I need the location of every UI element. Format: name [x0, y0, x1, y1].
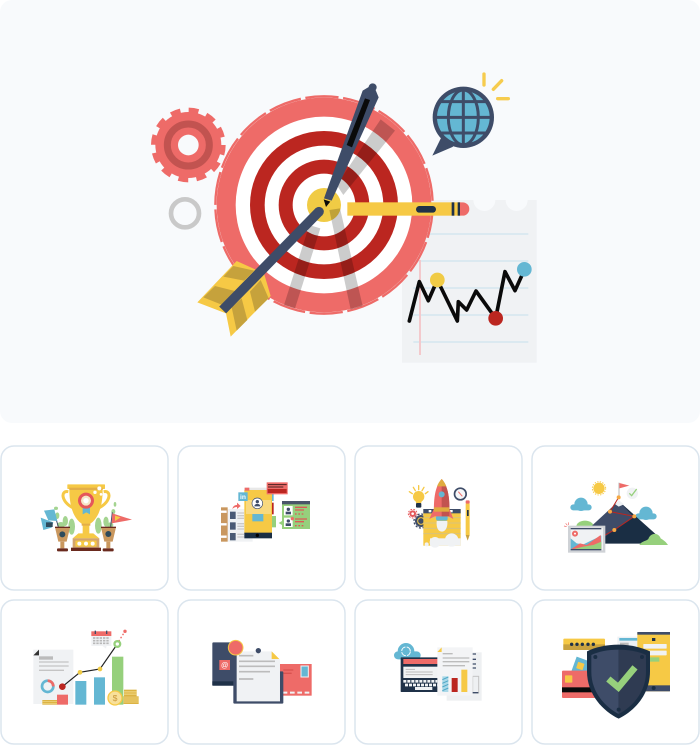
panel: trophy card	[1, 446, 168, 590]
icon: grey ring	[171, 199, 199, 227]
icon: photo card	[571, 657, 597, 678]
icon: chart screen	[564, 522, 605, 553]
icon: credit card	[562, 671, 595, 698]
icon: share arrow	[232, 503, 241, 509]
icon: linkedin badge: in	[240, 494, 246, 501]
icon: note pad	[423, 509, 461, 546]
icon: idea rays	[484, 74, 508, 99]
icon: notepad with line chart paper	[402, 189, 537, 363]
icon: check badge	[627, 488, 638, 499]
panel: mail card	[178, 600, 345, 744]
icon: document stack	[437, 647, 482, 701]
icon: salmon gear	[153, 110, 223, 180]
icon: phone login	[637, 632, 670, 691]
icon: tablet: @	[221, 661, 228, 670]
panel: laptop documents card	[355, 600, 522, 744]
icon: candidate cards	[279, 501, 310, 529]
icon: clouds	[570, 498, 657, 520]
icon: gears	[408, 509, 428, 528]
icon: browser window	[617, 637, 639, 653]
panel: growth chart card	[1, 600, 168, 744]
icon: yellow pencil	[466, 500, 470, 541]
icon: smoke clouds	[425, 521, 461, 548]
icon: trophy	[54, 484, 116, 551]
icon: sync cloud	[394, 643, 421, 660]
icon: dollar coin: $	[113, 693, 118, 703]
icon: pencil	[347, 202, 469, 216]
icon: envelope	[279, 664, 312, 696]
panel: security shield card	[532, 600, 699, 744]
bar chart	[57, 657, 123, 705]
panel: recruitment card	[178, 446, 345, 590]
icon: laptop	[401, 657, 439, 692]
icon: compass dial	[454, 487, 467, 501]
icon: message bubble	[267, 482, 288, 494]
icon: pen	[324, 83, 379, 207]
icon: shield with check	[587, 645, 650, 719]
icon: password bar	[563, 639, 605, 650]
icon: coin stacks	[42, 690, 139, 705]
panel: hero target illustration	[0, 0, 700, 423]
line chart	[409, 262, 532, 326]
icon: rocket	[429, 479, 453, 521]
icon: phone with profile	[244, 488, 276, 538]
icon: sun	[592, 482, 606, 495]
icon: target board	[215, 96, 433, 314]
icon: report document	[33, 650, 73, 704]
icon: notification badge	[228, 640, 243, 655]
icon: mountain	[576, 483, 668, 545]
icon: small cups and flags	[41, 509, 132, 551]
panel: rocket card	[355, 446, 522, 590]
line chart	[59, 630, 127, 690]
icon: globe speech bubble	[432, 87, 494, 156]
panel: mountain card	[532, 446, 699, 590]
icon: calendar	[91, 631, 111, 649]
icon: light bulb	[409, 486, 428, 508]
icon: arrow	[197, 207, 324, 337]
icon: contact notebook	[218, 507, 253, 542]
icon: compass legs	[284, 119, 395, 309]
icon: clipboard document	[233, 648, 283, 704]
